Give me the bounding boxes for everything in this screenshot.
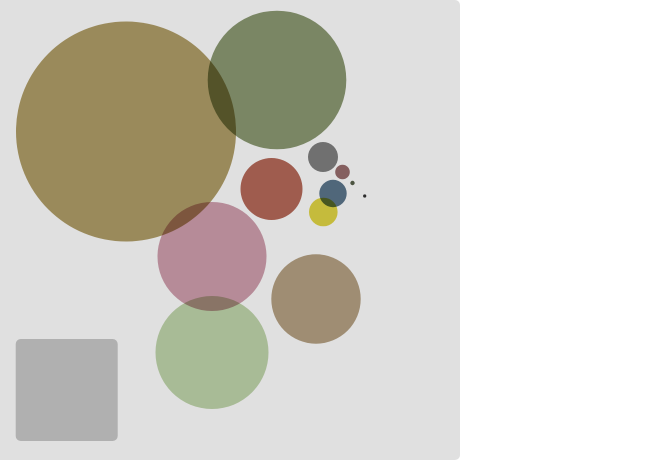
bubble: dusty pink <box>158 202 266 311</box>
bubble: dark grey <box>308 142 338 172</box>
bubble group <box>16 11 366 409</box>
panel: grey background <box>0 0 460 460</box>
bubble: slate blue <box>319 180 347 207</box>
bubble: olive green <box>208 11 346 149</box>
bubble: yellow <box>309 198 338 226</box>
bubble: tan <box>271 254 361 344</box>
bubble: tiny dark dot <box>363 194 366 198</box>
legend square <box>16 339 118 441</box>
bubble: large ochre <box>16 22 236 242</box>
bubble: maroon <box>335 165 350 179</box>
bubble: light green <box>156 296 268 409</box>
bubble: brick red <box>240 158 302 220</box>
bubble: tiny olive dot <box>350 181 355 185</box>
